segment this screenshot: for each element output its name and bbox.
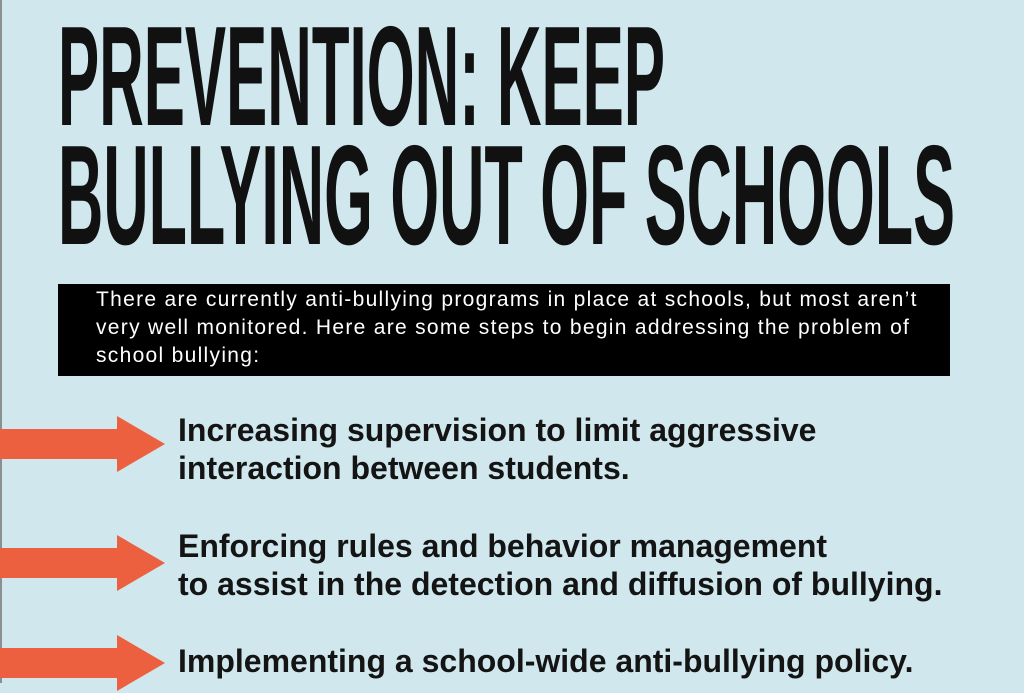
step 2: to assist in the detection and diffusion of bullying. (178, 566, 942, 602)
step 1: Increasing supervision to limit aggressive (178, 412, 816, 448)
step 1 (178, 412, 816, 486)
arrow 1 (0, 416, 165, 472)
intro text box: school bullying: (96, 344, 260, 367)
step 2 (178, 528, 942, 602)
intro text box (58, 284, 950, 376)
step 1: interaction between students. (178, 450, 630, 486)
title (58, 0, 955, 260)
arrow 2 (0, 535, 165, 591)
step 2: Enforcing rules and behavior management (178, 528, 827, 564)
intro text box: very well monitored. Here are some steps to begin addressing the problem of (96, 316, 910, 339)
step 3: Implementing a school-wide anti-bullying policy. (178, 643, 913, 679)
arrow 3 (0, 635, 165, 691)
intro text box: There are currently anti-bullying programs in place at schools, but most aren’t (96, 288, 918, 311)
